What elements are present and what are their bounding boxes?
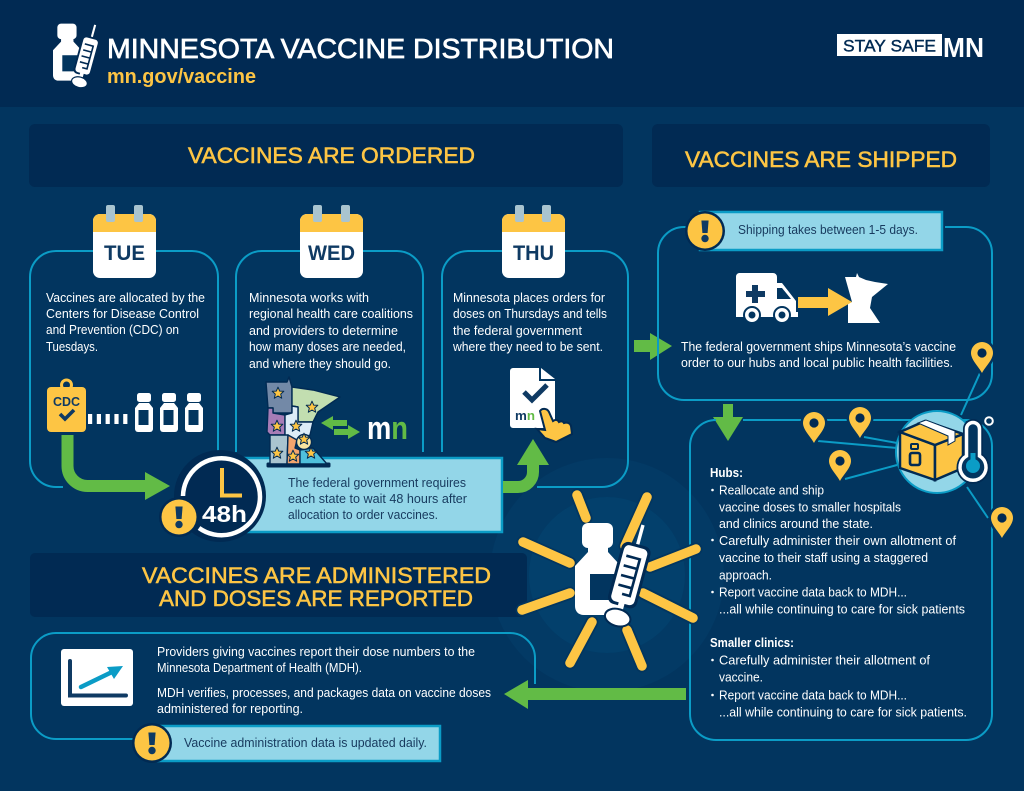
text: hubs: vaccine doses to smaller hospitals [719,500,901,514]
text: Wednesday step: how many doses are needed, [249,339,406,354]
arrowhead: to clock [145,472,170,500]
callout: 48 hour wait: each state to wait 48 hours after [288,491,468,506]
heading panel: vaccines are ordered [29,124,623,187]
panel: Tuesday [30,205,218,487]
header band [0,0,1024,107]
text: smaller clinics: Smaller clinics: [710,635,794,650]
icon: order document with pointing hand [510,368,572,442]
callout: 48 hour wait: allocation to order vaccines. [288,507,438,522]
callout: daily update: Vaccine administration data is updated daily. [184,735,427,750]
halo rings behind large vaccine icon [490,458,724,692]
logo: Stay Safe MN: STAY SAFE [843,36,936,56]
icon: CDC clipboard: CDC [53,395,80,409]
arrow: ambulance to state [798,288,852,316]
heading panel: vaccines are shipped [652,124,990,187]
logo: mn: mn [367,410,408,446]
callout: daily update [132,723,440,763]
icon: rising chart [61,649,133,706]
text: Thursday step: where they need to be sent. [452,339,603,354]
text: hubs: Report vaccine data back to MDH... [719,584,907,600]
text: smaller clinics [710,635,967,720]
text: Wednesday step: and where they should go. [249,356,391,371]
icon: ambulance [736,273,798,323]
text: Tuesday step: Tuesdays. [46,339,98,354]
icon: calendar TUE: TUE [104,242,145,265]
text: hubs: Carefully administer their own allotment of [719,533,956,548]
text: reporting description: MDH verifies, processes, and packages data on vaccine doses [157,685,491,700]
arrow: shipping to hubs [713,404,743,441]
icon: order document with pointing hand: mn [515,408,535,423]
text: Thursday step: the federal government [453,323,582,338]
text: shipping description: The federal government ships Minnesota’s vaccine [681,339,956,354]
map: Minnesota health care regions [266,377,340,466]
icon: location pins [803,342,1013,538]
text: smaller clinics: vaccine. [719,670,763,684]
text: Wednesday step: regional health care coalitions [249,306,413,321]
text: hubs: approach. [719,568,772,582]
icon: cold chain box with thermometer [896,411,993,493]
text: Tuesday step: Centers for Disease Control [46,306,199,321]
text: hubs: and clinics around the state. [719,516,873,531]
text: Tuesday step: Vaccines are allocated by the [46,290,205,305]
title: MINNESOTA VACCINE DISTRIBUTION [107,33,614,64]
text: shipping description [681,339,956,370]
heading panel: vaccines are administered [30,553,527,617]
heading panel: vaccines are administered: VACCINES ARE ADMINISTERED [142,563,491,588]
website link: mn.gov/vaccine [107,66,256,88]
text: Thursday step: doses on Thursdays and tells [453,306,607,321]
arrow: CDC to 48 hour clock [68,435,146,486]
text: reporting description: Providers giving vaccines report their dose numbers to the [157,644,475,659]
text: hubs: vaccine to their staff using a staggered [719,550,928,565]
text: shipping description: order to our hubs and local public health facilities. [681,355,953,370]
network lines from box to pins [818,373,988,518]
text: smaller clinics: ...all while continuing to care for sick patients. [719,704,967,720]
text: reporting description: administered for reporting. [157,701,303,716]
heading panel: vaccines are ordered: VACCINES ARE ORDERED [188,143,475,168]
callout: 48 hour wait: The federal government requires [288,475,466,490]
text: Thursday step: Minnesota places orders for [453,290,606,305]
text: reporting description [157,644,491,716]
panel: Wednesday [236,205,423,452]
panel: reporting [31,633,535,763]
text: Wednesday step: Minnesota works with [249,290,369,305]
heading panel: vaccines are administered: AND DOSES ARE REPORTED [159,586,473,611]
callout: 48 hour wait [240,458,502,532]
icon: calendar THU: THU [513,242,554,265]
panel: Thursday [442,205,628,487]
callout: shipping time [685,211,942,251]
arrow: clinics to reporting [504,680,686,709]
icon: calendar THU [502,205,565,278]
icon: 48h clock [159,450,266,542]
text: reporting description: Minnesota Department of Health (MDH). [157,660,362,675]
arrow: callout to Thursday [503,439,549,487]
text: Wednesday step: and providers to determine [249,323,398,338]
logo: Stay Safe MN [837,32,984,63]
callout: shipping time: Shipping takes between 1-5 days. [738,222,918,237]
text: hubs: Hubs: [710,465,743,480]
icon: Minnesota state outline [845,273,888,323]
text: smaller clinics: Carefully administer their allotment of [719,652,930,668]
text: Tuesday step [46,290,205,354]
icon: calendar TUE [93,205,156,278]
icon: vial and syringe [53,22,104,90]
icon: large vial and syringe [575,521,657,630]
icon: two way arrows between state and federal [321,416,360,439]
text: Tuesday step: and Prevention (CDC) on [46,322,179,337]
icon: calendar WED: WED [308,242,355,265]
text: Thursday step [452,290,607,354]
text: Wednesday step [249,290,413,371]
icon: CDC clipboard [47,380,86,432]
icon: 48h clock: 48h [202,501,247,527]
text: hubs [710,465,965,616]
text: hubs: Reallocate and ship [719,482,824,498]
logo: Stay Safe MN: MN [943,32,984,63]
icon: calendar WED [300,205,363,278]
text: hubs: ...all while continuing to care for sick patients [719,602,965,616]
panel: shipping [658,211,992,400]
icon: row of vials [88,393,203,432]
icon: burst rays [522,495,696,666]
heading panel: vaccines are shipped: VACCINES ARE SHIPPED [685,147,957,172]
text: smaller clinics: Report vaccine data back to MDH... [719,688,907,702]
arrow: Thursday to shipping [634,333,672,360]
panel: hubs and clinics [690,420,992,740]
